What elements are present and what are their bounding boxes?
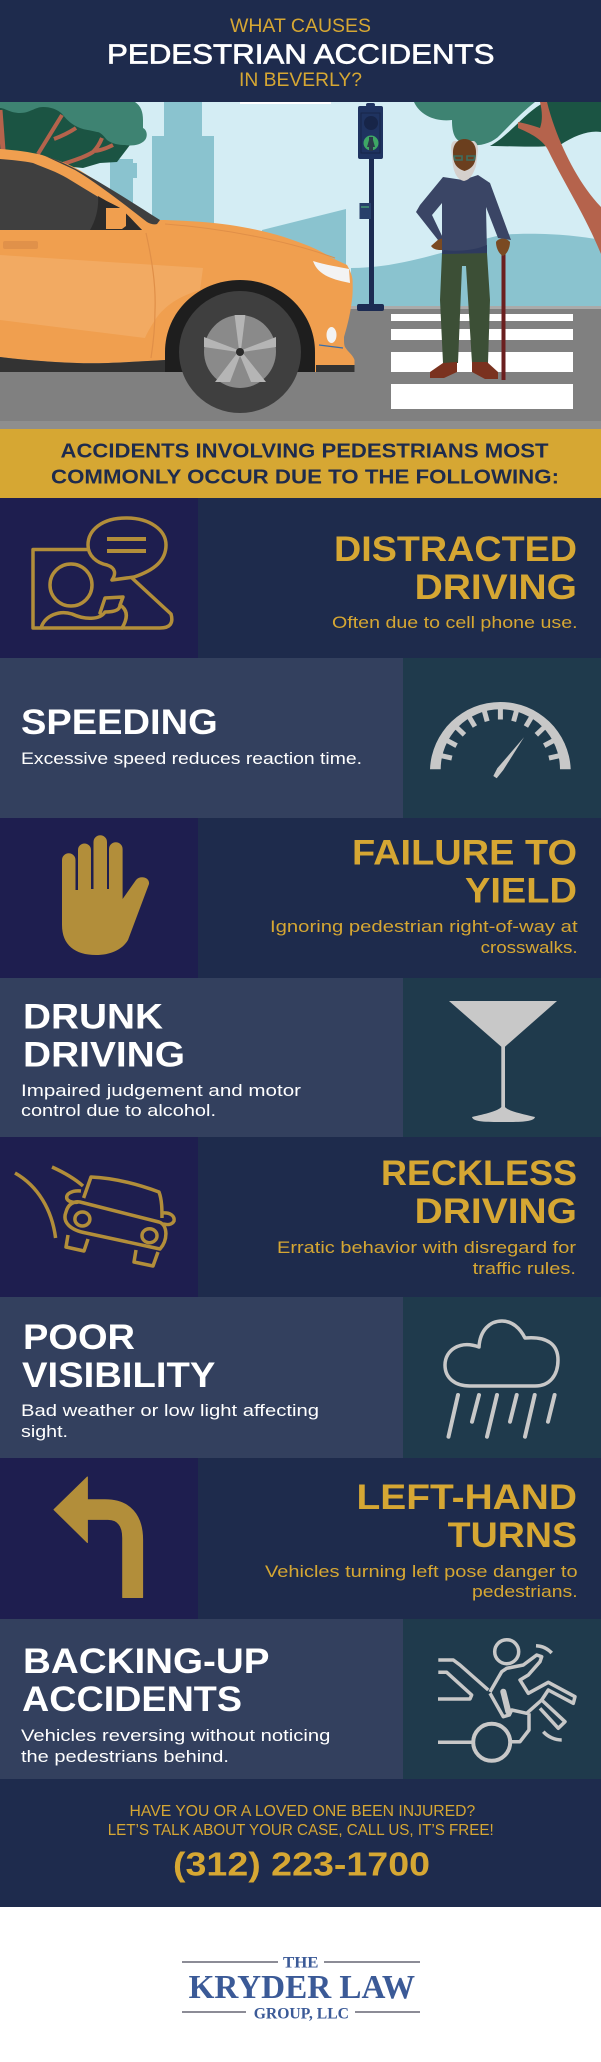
- phone number: (312) 223-1700: [173, 1846, 430, 1882]
- panel: poor visibility: sight.: [21, 1423, 68, 1441]
- panel: left-hand turns: [0, 1458, 601, 1619]
- icon: speedometer: [430, 702, 571, 778]
- heading: DISTRACTED: [334, 530, 577, 569]
- panel: failure to yield: [0, 818, 601, 978]
- title line: in beverly: IN BEVERLY?: [239, 69, 362, 91]
- panel: reckless driving: traffic rules.: [473, 1260, 576, 1278]
- left tree: [0, 102, 147, 168]
- icon: pedestrian struck by car: [438, 1640, 575, 1761]
- panel: speeding: [0, 658, 601, 818]
- orange car: [0, 149, 354, 413]
- banner: intro statement: [0, 429, 601, 498]
- crosswalk stripes: [391, 314, 573, 409]
- icon: swerving car: [15, 1167, 174, 1266]
- logo: the kryder law group: GROUP, LLC: [254, 2006, 349, 2023]
- panel: failure to yield: crosswalks.: [481, 939, 578, 957]
- skyline buildings: [110, 102, 601, 310]
- logo: the kryder law group: KRYDER LAW: [189, 1969, 415, 2006]
- banner: intro statement: COMMONLY OCCUR DUE TO THE FOLLOWING:: [51, 467, 559, 489]
- description: Erratic behavior with disregard for: [277, 1239, 577, 1257]
- panel: distracted driving: [0, 498, 601, 658]
- heading: FAILURE TO: [352, 834, 577, 873]
- heading: BACKING-UP: [23, 1642, 270, 1681]
- panel: reckless driving: [0, 1137, 601, 1297]
- description: Ignoring pedestrian right-of-way at: [270, 918, 578, 936]
- panel: backing-up accidents: ACCIDENTS: [22, 1680, 242, 1719]
- illustration: street scene: [0, 102, 601, 429]
- panel: drunk driving: [0, 978, 601, 1137]
- panel: poor visibility: [0, 1297, 601, 1458]
- traffic signal: [357, 103, 384, 311]
- heading: SPEEDING: [21, 703, 218, 742]
- panel: backing-up accidents: the pedestrians behind.: [21, 1748, 229, 1766]
- call to action panel: [0, 1779, 601, 1907]
- description: Impaired judgement and motor: [21, 1082, 302, 1100]
- panel: failure to yield: YIELD: [465, 872, 577, 911]
- panel: reckless driving: DRIVING: [415, 1192, 577, 1231]
- panel: drunk driving: DRIVING: [23, 1036, 185, 1075]
- wheel: [165, 280, 315, 413]
- prompt text: HAVE YOU OR A LOVED ONE BEEN INJURED?: [130, 1803, 475, 1820]
- heading: POOR: [23, 1318, 135, 1357]
- logo: the kryder law group: [182, 1955, 420, 2023]
- description: Often due to cell phone use.: [332, 614, 578, 632]
- description: Vehicles reversing without noticing: [21, 1727, 330, 1745]
- icon: raised hand: [62, 835, 149, 955]
- pedestrian figure: [416, 139, 511, 380]
- title line: pedestrian accidents: PEDESTRIAN ACCIDENTS: [107, 38, 494, 69]
- panel: distracted driving: DRIVING: [415, 568, 577, 607]
- icon: driver with speech bubble: [33, 518, 172, 628]
- icon: martini glass: [449, 1001, 557, 1122]
- call to action panel: LET’S TALK ABOUT YOUR CASE, CALL US, IT’S FREE!: [108, 1822, 494, 1839]
- description: Excessive speed reduces reaction time.: [21, 750, 362, 768]
- heading: RECKLESS: [381, 1154, 577, 1193]
- heading: DRUNK: [23, 998, 163, 1037]
- road: [0, 306, 601, 429]
- panel: poor visibility: VISIBILITY: [22, 1356, 215, 1395]
- banner: intro statement: ACCIDENTS INVOLVING PEDESTRIANS MOST: [60, 441, 548, 463]
- logo: the kryder law group: THE: [283, 1955, 318, 1972]
- heading: LEFT-HAND: [356, 1478, 577, 1517]
- description: Bad weather or low light affecting: [21, 1402, 319, 1420]
- panel: left-hand turns: TURNS: [448, 1516, 577, 1555]
- icon: rain cloud: [445, 1321, 558, 1437]
- header panel: [0, 0, 601, 102]
- panel: drunk driving: control due to alcohol.: [21, 1102, 216, 1120]
- right tree: [414, 102, 601, 254]
- description: Vehicles turning left pose danger to: [265, 1563, 578, 1581]
- panel: backing-up accidents: [0, 1619, 601, 1779]
- title line: what causes: WHAT CAUSES: [230, 15, 371, 37]
- icon: left turn arrow: [54, 1477, 143, 1598]
- panel: left-hand turns: pedestrians.: [472, 1583, 578, 1601]
